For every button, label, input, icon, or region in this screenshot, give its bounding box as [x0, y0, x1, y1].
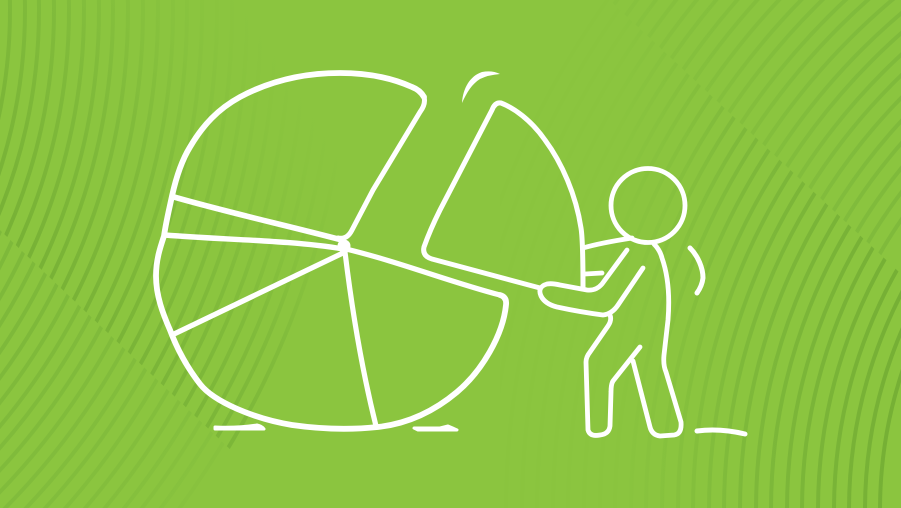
pie chart	[156, 73, 506, 429]
background arcs: upper left	[0, 0, 290, 449]
person	[540, 168, 685, 436]
background arcs: lower left	[0, 230, 158, 508]
background arcs: upper right	[772, 0, 901, 255]
ground mark: left	[215, 425, 264, 429]
spoke: bottom divider	[345, 252, 376, 426]
spoke: left slice lower edge	[172, 252, 345, 335]
spoke: top slice lower edge	[174, 197, 342, 240]
spoke: thin wedge lower edge	[165, 235, 343, 249]
body and legs	[586, 244, 681, 436]
removed pie slice	[424, 103, 583, 288]
head	[611, 168, 685, 242]
centre junction	[338, 240, 350, 252]
spoke: top slice right edge	[338, 97, 424, 238]
spoke: right slice upper edge	[346, 249, 500, 295]
far arm	[583, 238, 632, 274]
motion mark: right of person	[690, 248, 703, 293]
pie outer rim	[156, 73, 506, 429]
arms	[540, 250, 643, 315]
motion mark: above slice	[462, 71, 500, 103]
ground mark: centre	[414, 426, 457, 430]
background arcs: lower right	[703, 95, 901, 508]
ground mark: right	[697, 430, 745, 434]
